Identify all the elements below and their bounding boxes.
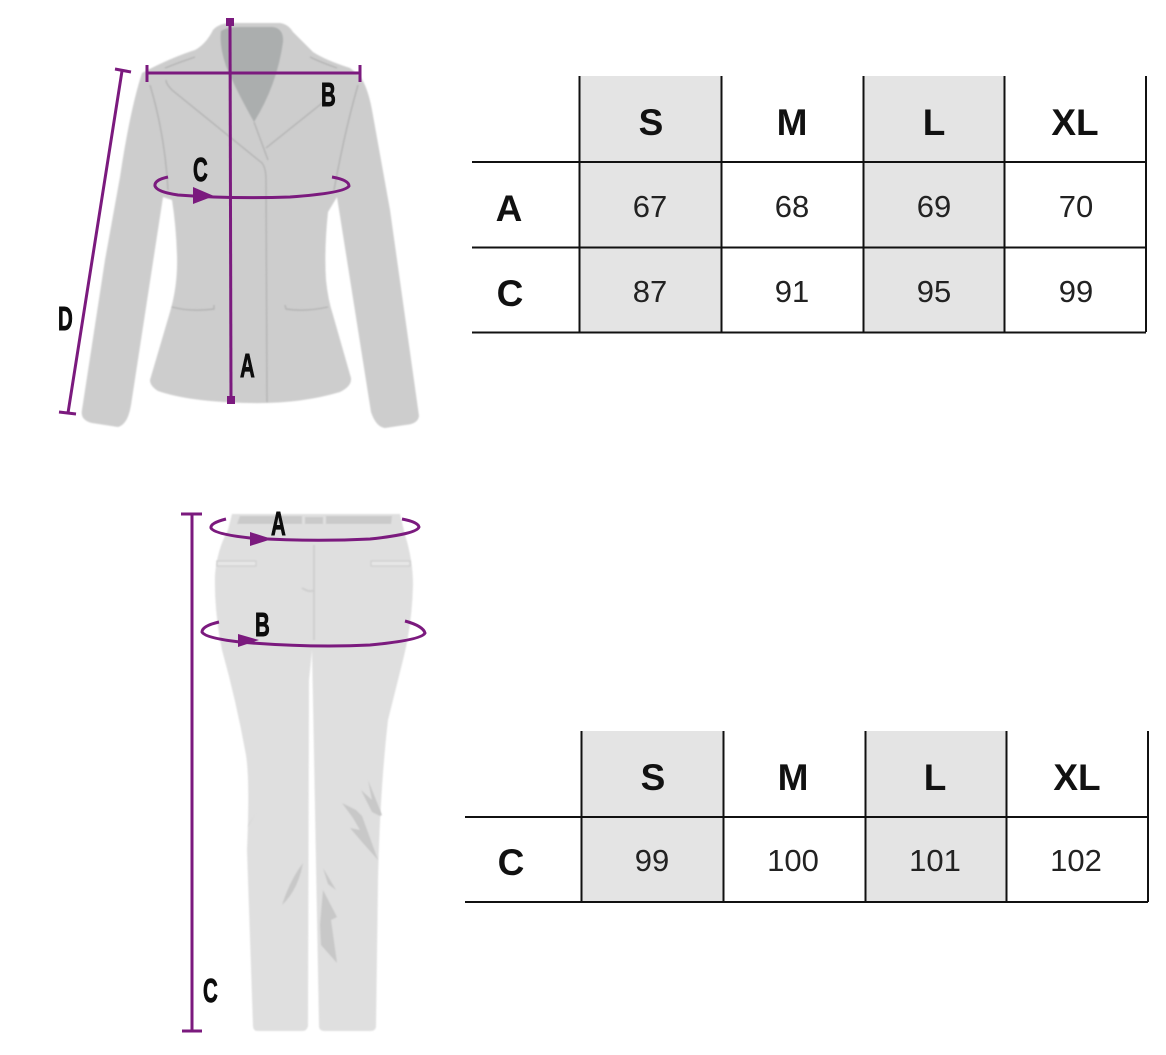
header row: XL [1053, 757, 1101, 798]
row A: 68 [775, 189, 809, 224]
jacket collar lining [221, 27, 283, 122]
header row: M [777, 102, 807, 143]
trousers label B: B [255, 606, 270, 643]
header row: XL [1051, 102, 1099, 143]
header row: L [923, 102, 945, 143]
header row: S [639, 102, 663, 143]
header row: L [924, 757, 946, 798]
header row [639, 102, 1099, 143]
jacket illustration [58, 18, 419, 428]
trousers label A: A [271, 505, 286, 542]
trousers measure C line [181, 514, 202, 1031]
jacket seams and pockets [150, 57, 358, 402]
trousers measure B loop [202, 621, 425, 647]
row C [497, 273, 1093, 314]
table grid [472, 76, 1146, 332]
trousers size table [465, 731, 1148, 902]
trousers measure A loop [211, 519, 419, 546]
jacket label B: B [321, 76, 336, 113]
row C: 102 [1050, 843, 1102, 878]
header row [641, 757, 1101, 798]
trousers label C: C [203, 972, 218, 1009]
jacket size table [472, 76, 1146, 332]
measure B shoulder line [147, 65, 360, 82]
table grid [465, 731, 1148, 902]
row C: 99 [1059, 274, 1093, 309]
row C: 95 [917, 274, 951, 309]
jacket label D: D [58, 300, 73, 337]
row C: C [498, 842, 524, 883]
row A: A [496, 188, 522, 229]
header row: M [778, 757, 808, 798]
shaded columns [580, 76, 1004, 332]
trousers details [217, 545, 410, 963]
row C: 91 [775, 274, 809, 309]
shaded columns [582, 731, 1006, 901]
row A: 67 [633, 189, 667, 224]
jacket label C: C [193, 151, 208, 188]
row A: 70 [1059, 189, 1093, 224]
jacket label A: A [240, 347, 255, 384]
measure A vertical line [226, 18, 235, 404]
row C: C [497, 273, 523, 314]
row A [496, 188, 1093, 229]
row C: 87 [633, 274, 667, 309]
row C: 99 [635, 843, 669, 878]
row A: 69 [917, 189, 951, 224]
measure D sleeve line [59, 69, 131, 414]
jacket body [82, 23, 419, 428]
trousers waistband [237, 516, 392, 524]
trousers shape [215, 514, 413, 1031]
measure C waist loop [155, 177, 349, 204]
row C [498, 842, 1102, 883]
header row: S [641, 757, 665, 798]
row C: 101 [909, 843, 961, 878]
row C: 100 [767, 843, 819, 878]
trousers illustration [181, 505, 425, 1031]
